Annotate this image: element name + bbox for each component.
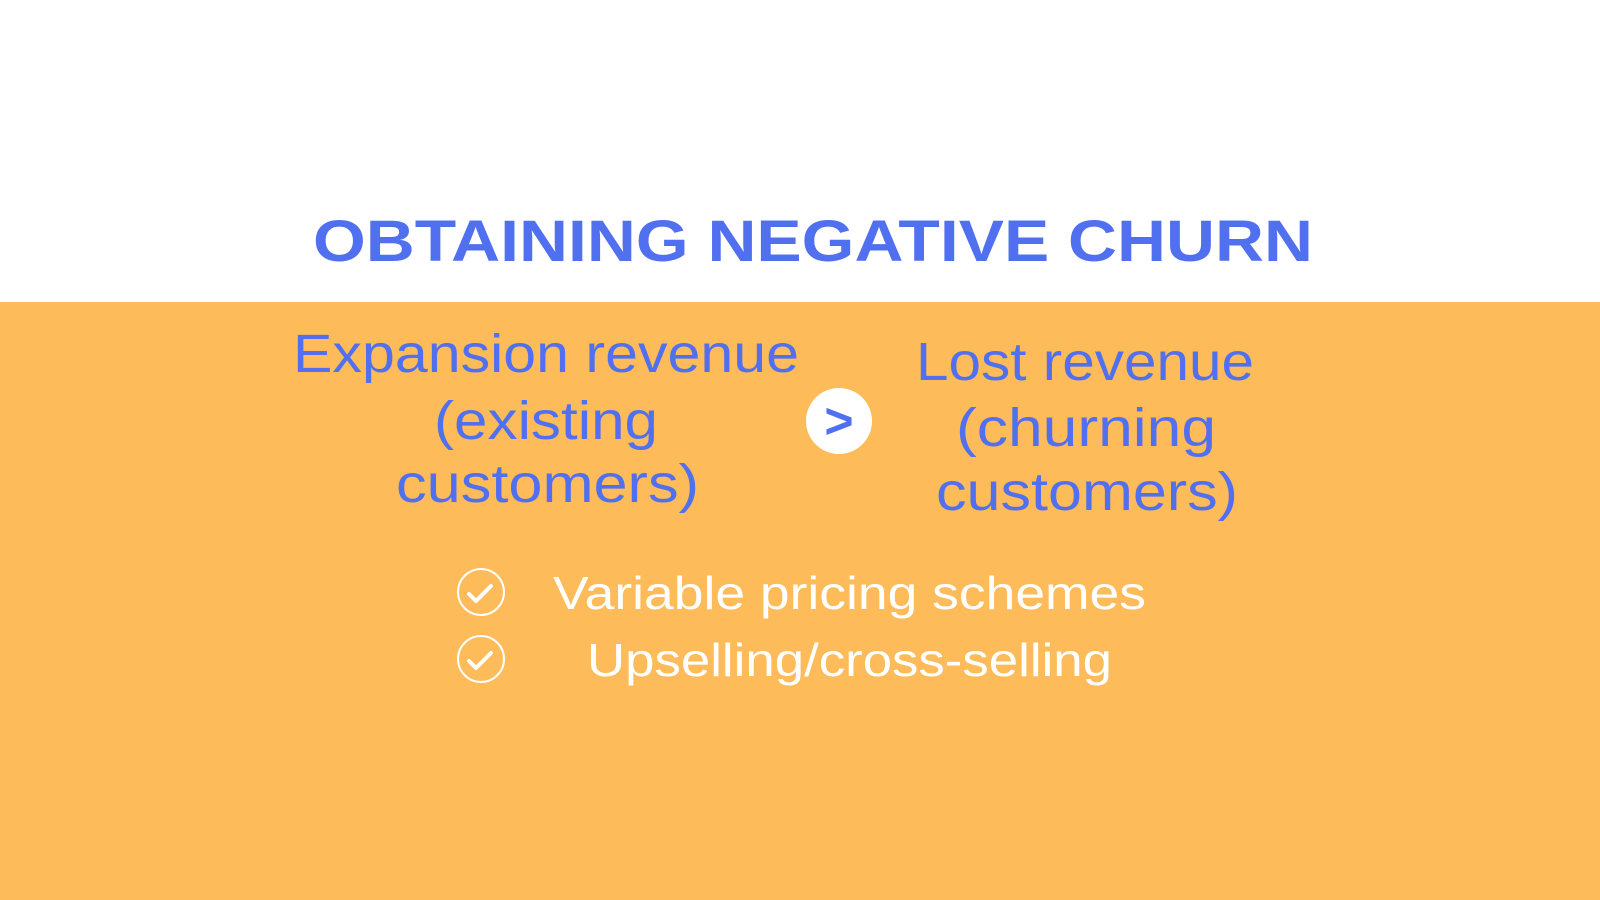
text block: lost revenue [916,332,1254,522]
text block: lost revenue: Lost revenue [916,332,1254,392]
text block: expansion revenue: (existing [434,391,658,451]
icon: check 2 [458,636,504,682]
icon: check 1 [458,569,504,615]
icon: greater-than circle [806,388,872,454]
text block: lost revenue: customers) [936,462,1238,522]
text block: expansion revenue: Expansion revenue [293,324,799,384]
text block: lost revenue: (churning [956,398,1216,458]
text: variable pricing: Variable pricing schemes [553,567,1146,619]
panel: orange background [0,302,1600,900]
text: upselling: Upselling/cross-selling [587,634,1112,686]
text block: expansion revenue: customers) [396,454,699,514]
icon: greater-than circle: > [824,393,854,449]
title: OBTAINING NEGATIVE CHURN [313,209,1313,274]
text block: expansion revenue [293,324,799,514]
